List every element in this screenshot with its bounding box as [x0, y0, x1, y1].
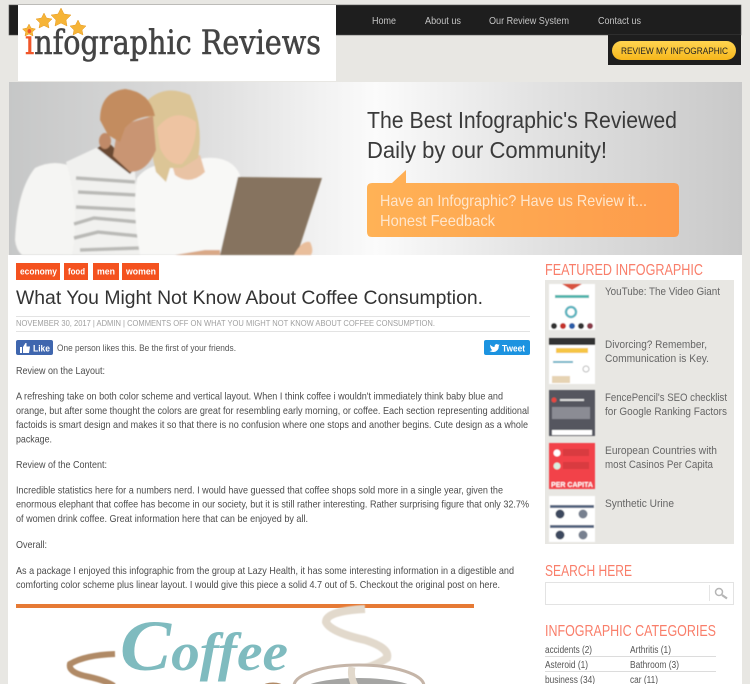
steam: left brown: [70, 654, 115, 684]
article meta: NOVEMBER 30, 2017 | ADMIN | COMMENTS OFF ON WHAT YOU MIGHT NOT KNOW ABOUT COFFEE CONSUMPTION.: [16, 318, 435, 328]
like button: Like: [33, 344, 50, 354]
item: FencePencil: FencePencil's SEO checklist: [605, 392, 727, 404]
headline: Daily by our Community!: [367, 137, 607, 163]
item: FencePencil: for Google Ranking Factors: [605, 406, 727, 418]
subheading: content: Review of the Content:: [16, 460, 107, 471]
tag: economy: economy: [20, 266, 58, 276]
item: Divorcing: [549, 338, 709, 384]
panel: [545, 280, 734, 544]
nav item: Our Review System: Our Review System: [489, 16, 569, 27]
item: European Countries: most Casinos Per Capita: [605, 459, 714, 471]
item: YouTube: [549, 284, 720, 330]
icon: stars: [22, 8, 86, 36]
hero banner: [9, 82, 742, 255]
headline: [367, 107, 677, 163]
search box: [546, 582, 734, 604]
subheading: layout: Review on the Layout:: [16, 366, 105, 377]
icon: magnifier: [716, 588, 727, 598]
tag: women: [122, 263, 159, 280]
paragraph: overall: comforting color scheme plus linear layout. I would give this piece a solid 4.7 out of 5. Checkout the original post on here.: [16, 580, 500, 591]
heading: FEATURED INFOGRAPHIC: [545, 262, 703, 279]
category list: [545, 645, 716, 684]
like count text: One person likes this. Be the first of your friends.: [57, 343, 236, 354]
item: European Countries: PER CAPITA: [551, 482, 593, 489]
tag: women: women: [125, 266, 156, 276]
tags: [16, 263, 159, 280]
paragraph: layout review: package.: [16, 434, 52, 446]
speech bubble: Have an Infographic? Have us Review it...: [380, 193, 647, 210]
item: Synthetic Urine: [549, 496, 674, 542]
paragraph: layout review: orange, but after some thought the colors are great for resembling early morning, or coffee. Each section representing additional: [16, 406, 529, 417]
paragraph: layout review: factoids is smart design and makes it so that there is no confusion where one stops and another begins. Cute design as a whole: [16, 420, 528, 431]
wordmark: infographic Reviews: [25, 23, 321, 63]
item: Synthetic Urine: Synthetic Urine: [605, 498, 674, 510]
tweet button: [484, 340, 530, 355]
coffee cup: [263, 665, 424, 684]
article title: What You Might Not Know About Coffee Consumption.: [16, 287, 483, 309]
sidebar: categories: [545, 623, 716, 684]
headline: The Best Infographic's Reviewed: [367, 107, 677, 133]
subheading: overall: Overall:: [16, 540, 47, 551]
item: Divorcing: Divorcing? Remember,: [605, 339, 707, 351]
paragraph: content review: of women drink coffee. Great information here that can be enjoyed by all.: [16, 514, 308, 525]
heading: SEARCH HERE: [545, 563, 632, 580]
paragraph: content review: [16, 486, 529, 525]
nav item: About us: About us: [425, 16, 461, 27]
tag: food: food: [68, 266, 85, 276]
speech bubble: [367, 170, 679, 237]
tag: men: men: [97, 266, 115, 276]
paragraph: layout review: [16, 392, 529, 446]
article body: [16, 366, 529, 591]
paragraph: layout review: A refreshing take on both color scheme and vertical layout. When I think coffee i wouldn't immediately think baby blue and: [16, 392, 503, 402]
item: European Countries: [549, 443, 717, 489]
button: review my infographic: REVIEW MY INFOGRAPHIC: [621, 45, 728, 56]
category list: Arthritis (1): [630, 645, 671, 656]
item: European Countries: European Countries with: [605, 445, 717, 457]
category list: Bathroom (3): [630, 660, 679, 671]
tag: men: [93, 263, 119, 280]
sidebar: search: [545, 563, 734, 604]
call to action tab: [608, 35, 741, 65]
logo: [18, 5, 336, 81]
speech bubble: Honest Feedback: [380, 213, 496, 230]
photo: couple with laptop: [15, 89, 322, 255]
item: Divorcing: Communication is Key.: [605, 353, 709, 365]
item: FencePencil: [549, 390, 727, 436]
paragraph: content review: Incredible statistics here for a numbers nerd. I would have guessed that coffee shops sold more in a single year, given the: [16, 486, 503, 496]
nav item: Home: Home: [372, 16, 396, 27]
tag: economy: [16, 263, 60, 280]
navigation bar: [9, 5, 741, 35]
sidebar: featured infographic: [545, 262, 734, 544]
paragraph: content review: enormous elephant that coffee has become in our society, but it is still rather interesting. Rather surprising figure that only 32.7%: [16, 500, 529, 510]
item: YouTube: YouTube: The Video Giant: [605, 286, 720, 298]
paragraph: overall: As a package I enjoyed this infographic from the group at Lazy Health, it has some interesting information in a digestible and: [16, 566, 514, 577]
category list: Asteroid (1): [545, 660, 588, 671]
nav item: Contact us: Contact us: [598, 16, 641, 27]
coffee lettering: Coffee: [120, 606, 288, 684]
tag: food: [64, 263, 88, 280]
content background: [8, 255, 742, 684]
tweet button: Tweet: [502, 344, 526, 354]
category list: accidents (2): [545, 645, 592, 656]
coffee infographic preview: [16, 604, 474, 684]
paragraph: overall: [16, 566, 514, 591]
like button: [16, 340, 53, 355]
steam: right beige: [326, 609, 387, 684]
